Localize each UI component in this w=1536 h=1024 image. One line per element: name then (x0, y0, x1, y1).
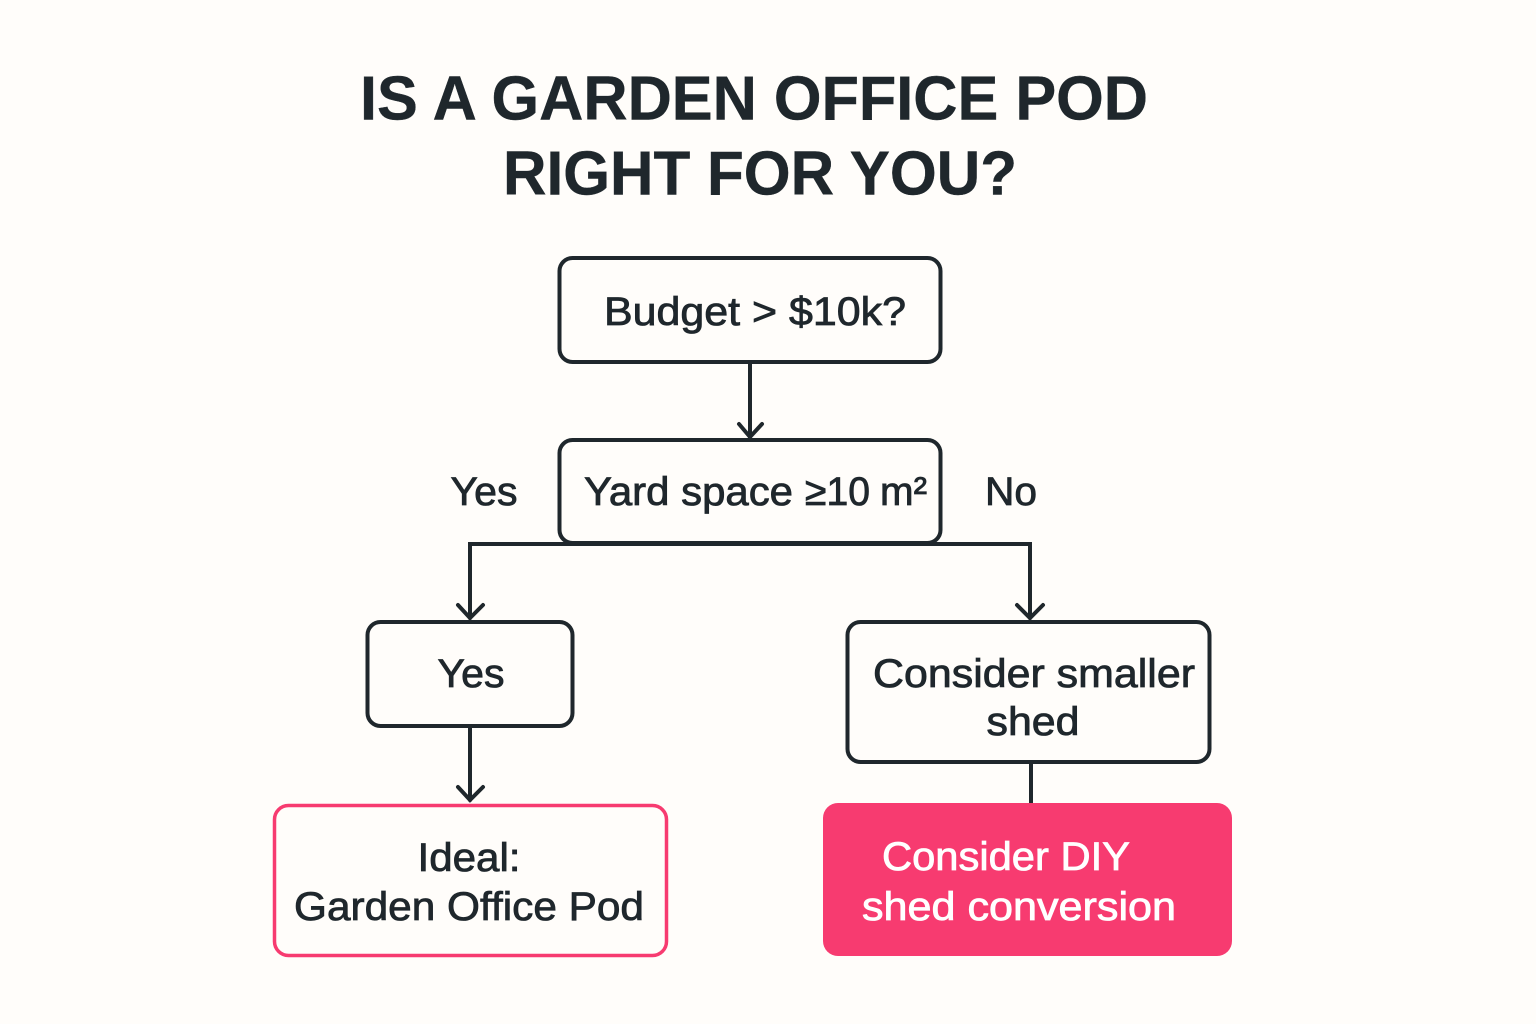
label: no branch: No (985, 470, 1037, 514)
title (360, 64, 1148, 208)
box: ideal garden office pod: Ideal: (418, 836, 520, 880)
box: yard space question: Yard space (584, 470, 793, 514)
box: yard space question: ≥10 (805, 470, 870, 514)
box: consider diy shed conversion: shed conversion (862, 885, 1176, 929)
box: yard space question (560, 440, 940, 543)
box: yard space question: m² (880, 470, 927, 514)
box: consider smaller shed (848, 622, 1210, 762)
title: IS A GARDEN OFFICE POD (360, 64, 1148, 134)
title: RIGHT FOR YOU? (503, 140, 1017, 208)
arrow: budget to yard space (739, 362, 762, 437)
box: consider diy shed conversion: Consider DIY (882, 835, 1130, 879)
box: consider smaller shed: Consider smaller (873, 652, 1195, 696)
box: consider diy shed conversion (823, 803, 1232, 956)
label: yes branch: Yes (450, 470, 518, 514)
box: ideal garden office pod: Garden Office Pod (294, 885, 644, 929)
box: ideal garden office pod (274, 806, 666, 956)
box: budget question: Budget > $10k? (604, 290, 906, 334)
box: consider smaller shed: shed (986, 700, 1080, 744)
box: yes: Yes (438, 652, 504, 696)
box: yes (368, 622, 572, 726)
arrow: yard space split to both branches (458, 544, 1043, 618)
box: budget question (560, 258, 940, 362)
arrow: yes to ideal (458, 726, 483, 800)
connector: smaller shed to diy (1029, 762, 1033, 804)
